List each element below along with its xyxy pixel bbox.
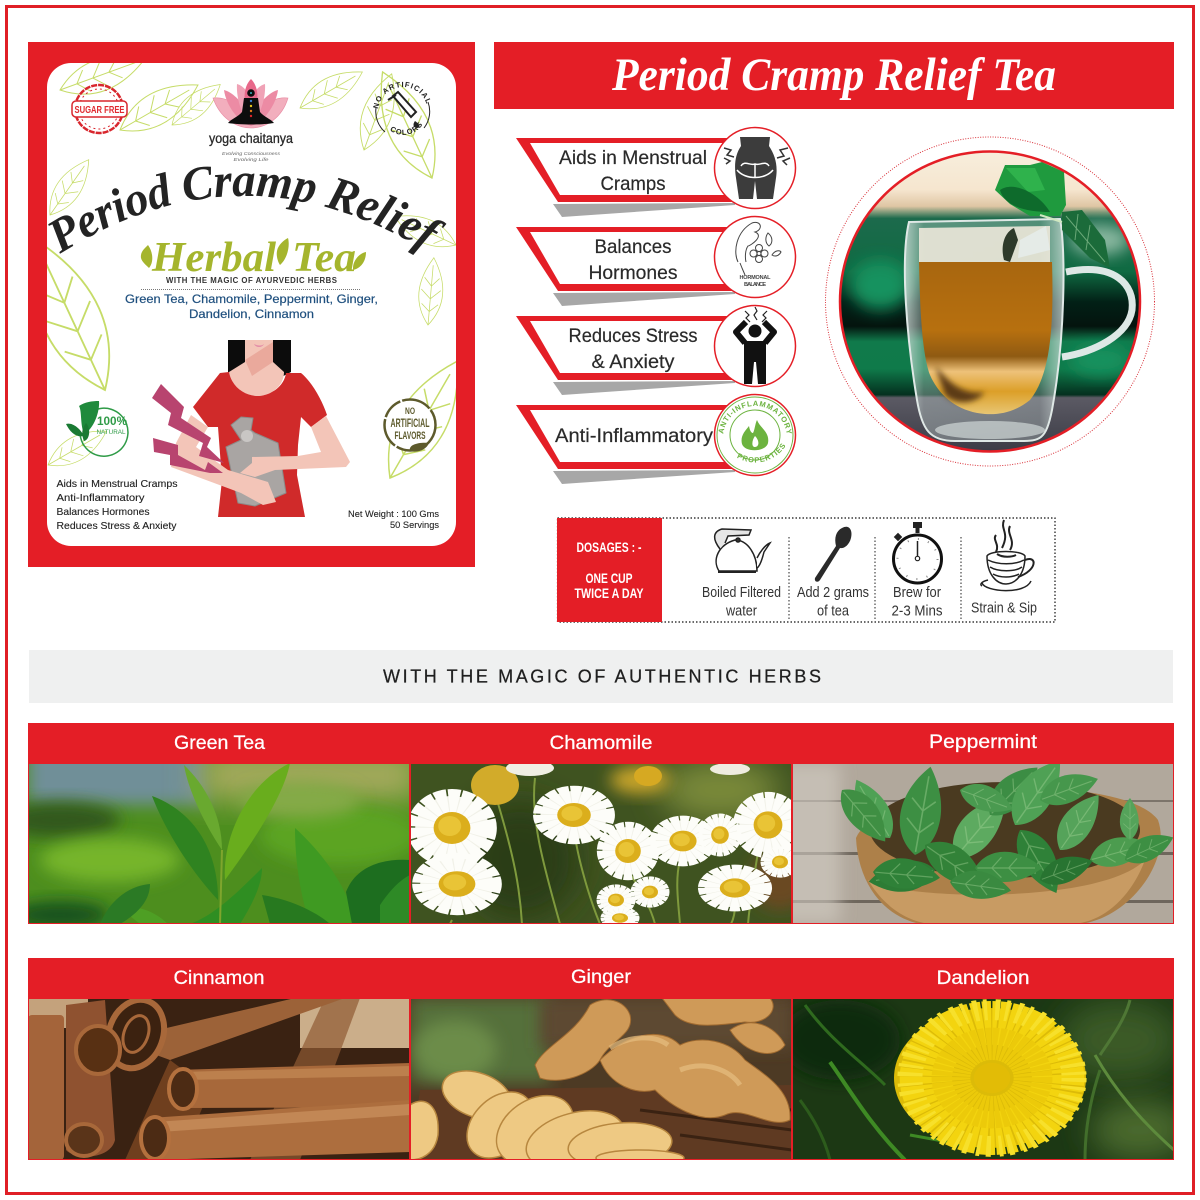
benefit: Aids in Menstrual Cramps: Aids in Menstrual — [559, 147, 707, 169]
hot water bottle — [226, 417, 286, 506]
benefit: Balances Hormones: Hormones — [588, 262, 678, 284]
herb card: Green Tea: Green Tea — [174, 733, 265, 754]
benefit: Anti-Inflammatory: Anti-Inflammatory — [555, 425, 713, 447]
net weight: 50 Servings — [390, 520, 439, 531]
heading: Period Cramp Relief: Period Cramp Relief — [48, 166, 446, 255]
icon: hormonal balance — [714, 216, 796, 298]
dosage text: DOSAGES : - — [576, 539, 642, 555]
net weight: Net Weight : 100 Gms — [348, 509, 439, 520]
herb card: Chamomile: Chamomile — [550, 733, 652, 754]
herb card: Dandelion — [780, 958, 1190, 1160]
ingredients list: Green Tea, Chamomile, Peppermint, Ginger, — [125, 292, 378, 306]
benefits list — [56, 479, 178, 532]
section heading band: WITH THE MAGIC OF AUTHENTIC HERBS — [383, 666, 821, 686]
step labels: Boiled Filtered — [702, 584, 781, 601]
heading: Herbal Tea — [141, 235, 366, 281]
step labels: of tea — [817, 602, 850, 620]
icon: 100% natural: NATURAL — [96, 430, 126, 436]
subheading: WITH THE MAGIC OF AYURVEDIC HERBS — [166, 276, 337, 285]
photo: green tea leaves — [29, 764, 409, 923]
icon: no artificial colors — [373, 82, 430, 135]
photo: tea mug in circle — [826, 137, 1154, 466]
benefit: Aids in Menstrual Cramps — [516, 128, 796, 217]
illustration: woman with hot water bottle — [152, 340, 350, 517]
benefit: Aids in Menstrual Cramps: Cramps — [600, 173, 666, 195]
dosage text: TWICE A DAY — [574, 585, 644, 601]
benefit: Anti-Inflammatory — [516, 394, 796, 484]
step labels — [702, 584, 1037, 620]
icon: sugar free stamp — [72, 85, 127, 133]
ingredients list: Dandelion, Cinnamon — [189, 307, 314, 321]
icon: kettle — [715, 529, 770, 572]
step labels: water — [725, 602, 757, 620]
icon: cup — [981, 520, 1034, 591]
step labels: Strain & Sip — [971, 600, 1037, 616]
dosage text: ONE CUP — [586, 570, 632, 586]
icon: anti-inflammatory flame: PROPERTIES — [737, 444, 785, 463]
icon: 100% natural — [66, 401, 128, 456]
herb card: Ginger: Ginger — [571, 967, 632, 988]
logo: yoga chaitanya: yoga chaitanya — [209, 131, 293, 146]
logo: yoga chaitanya: Evolving Life — [234, 157, 269, 163]
icon: hormonal balance: BALANCE — [744, 282, 766, 288]
benefit: Reduces Stress and Anxiety: & Anxiety — [592, 351, 675, 373]
icon: spoon — [815, 527, 852, 582]
benefits list: Reduces Stress & Anxiety — [56, 521, 177, 532]
benefit: Reduces Stress and Anxiety: Reduces Stress — [568, 325, 698, 347]
heading: Herbal Tea: Tea — [292, 235, 356, 281]
panel: dosage instructions — [557, 518, 1055, 622]
herb card: Ginger — [410, 958, 792, 1179]
herb card: Dandelion: Dandelion — [936, 968, 1030, 989]
net weight — [348, 509, 439, 531]
red shirt — [193, 372, 327, 517]
herb card: Peppermint: Peppermint — [929, 732, 1038, 753]
herb card: Chamomile — [410, 723, 810, 928]
icon: anti-inflammatory flame: ANTI-INFLAMMATORY — [718, 400, 792, 434]
step labels: Add 2 grams — [797, 584, 869, 601]
benefit: Balances Hormones: Balances — [594, 236, 672, 258]
logo: yoga chaitanya — [209, 79, 293, 163]
photo: chamomile flowers — [410, 760, 810, 928]
mug — [905, 219, 1132, 441]
mint sprig — [995, 162, 1110, 268]
icon: no artificial flavors: NO — [405, 406, 415, 417]
icon: 100% natural: 100% — [97, 414, 127, 428]
benefit: Reduces Stress and Anxiety — [516, 306, 796, 395]
title banner — [494, 42, 1174, 109]
icon: no artificial flavors: FLAVORS — [394, 430, 426, 442]
title banner: Period Cramp Relief Tea — [611, 49, 1056, 101]
icon: no artificial colors: COLORS — [390, 122, 422, 135]
step labels: 2-3 Mins — [892, 602, 942, 620]
icon: stopwatch — [894, 522, 942, 583]
herb card: Peppermint — [780, 723, 1178, 924]
icon: pelvis with cramps — [714, 128, 796, 208]
photo: dandelion flower — [780, 998, 1190, 1160]
benefits list: Anti-Inflammatory — [56, 493, 145, 504]
herb card: Green Tea — [28, 723, 410, 924]
icon: sugar free stamp: SUGAR FREE — [74, 105, 125, 116]
icon: hormonal balance: HORMONAL — [740, 275, 771, 281]
lightning bolts — [152, 384, 224, 463]
logo: yoga chaitanya: Evolving Consciousness — [222, 151, 281, 157]
herb card: Cinnamon — [28, 958, 410, 1160]
arms — [240, 416, 350, 477]
decorative leaf outlines — [8, 44, 478, 490]
benefits list: Balances Hormones — [56, 507, 150, 518]
dosage text — [574, 539, 644, 601]
photo: cinnamon sticks — [28, 992, 410, 1160]
icon: no artificial colors: NO ARTIFICIAL — [373, 82, 430, 108]
panel: product label — [28, 42, 475, 567]
icon: no artificial flavors — [384, 400, 436, 452]
icon: stressed person — [714, 306, 796, 386]
section heading band — [29, 650, 1173, 703]
icon: anti-inflammatory flame — [714, 394, 796, 476]
photo: peppermint in wooden bowl — [793, 764, 1173, 923]
benefit: Balances Hormones — [516, 216, 796, 306]
herb card: Cinnamon: Cinnamon — [174, 968, 264, 989]
ingredients list — [125, 292, 378, 321]
benefits list: Aids in Menstrual Cramps — [56, 479, 178, 490]
heading: Herbal Tea: Herbal — [151, 235, 276, 281]
step labels: Brew for — [893, 584, 941, 601]
photo: ginger root — [411, 999, 791, 1159]
icon: no artificial flavors: ARTIFICIAL — [390, 418, 430, 430]
